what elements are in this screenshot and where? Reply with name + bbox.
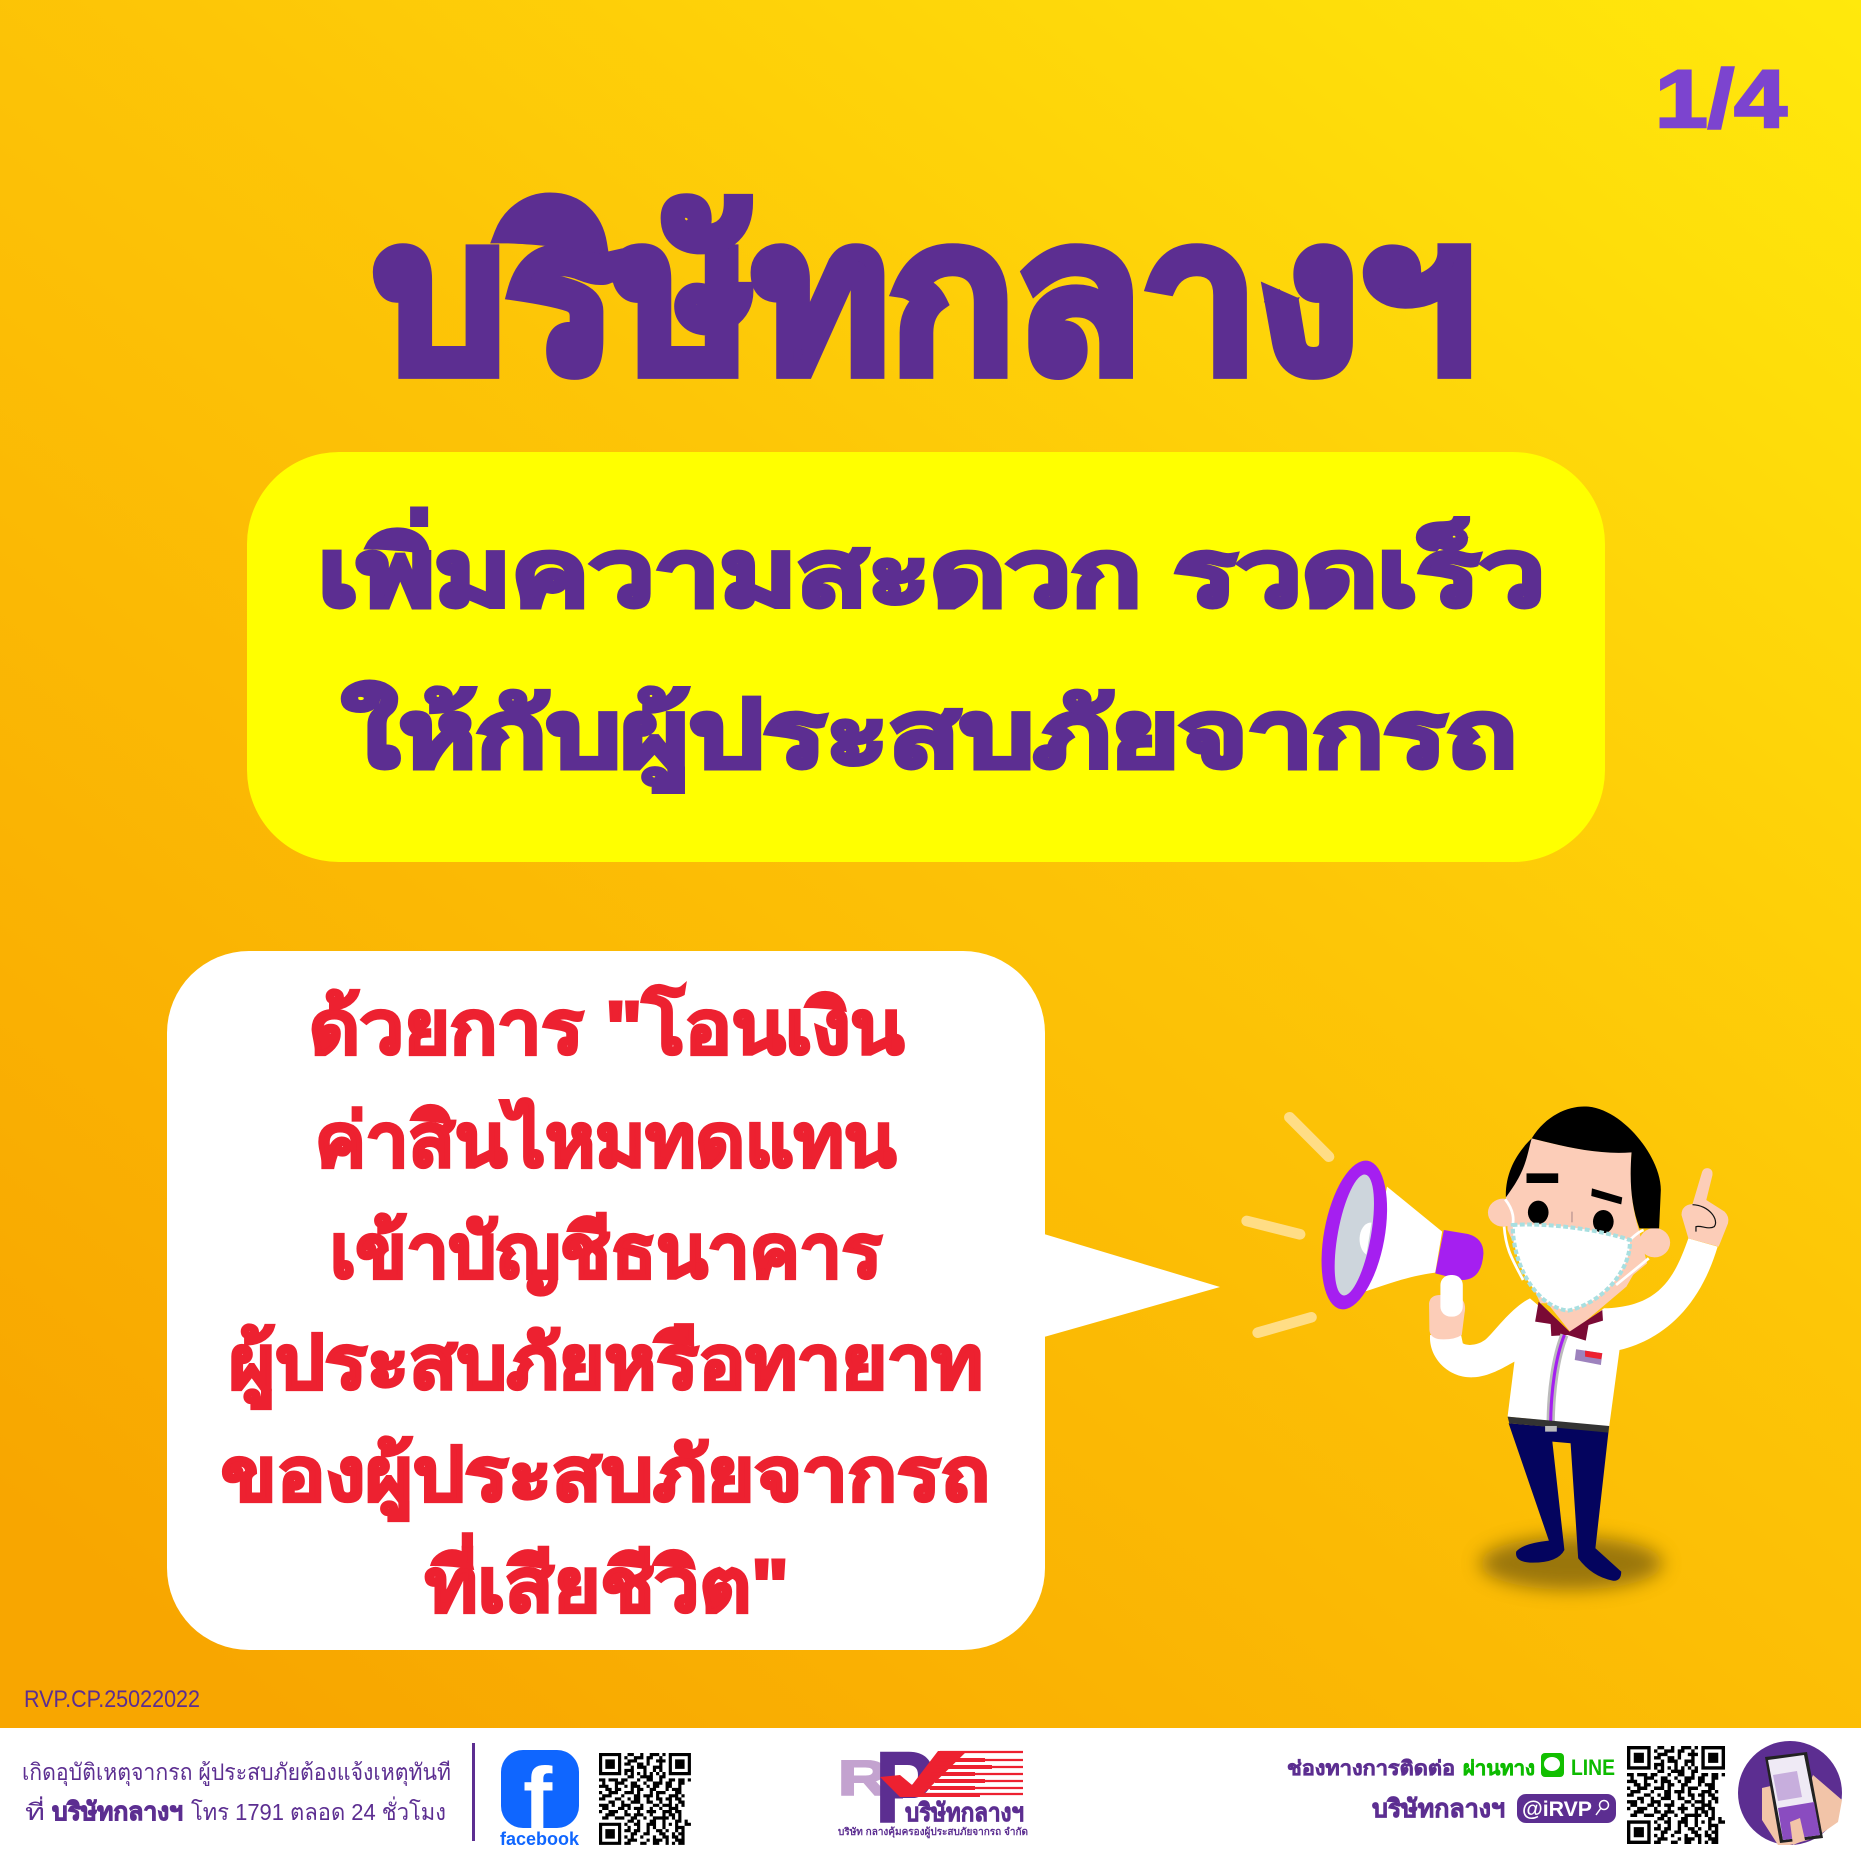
hotline text: ที่: [25, 1796, 45, 1825]
LINE contact: บริษัทกลางฯ: [1372, 1795, 1505, 1823]
headline line 1: เพิ่มความสะดวก รวดเร็ว: [318, 508, 1545, 625]
eyebrows and eyes: [1527, 1173, 1622, 1233]
ground shadow: [1480, 1537, 1663, 1590]
logo: RVP: [838, 1732, 1028, 1844]
face: [1506, 1138, 1647, 1303]
hotline text: [22, 1759, 451, 1826]
title: บริษัทกลางฯ: [374, 180, 1475, 415]
icon: facebook: facebook: [500, 1829, 580, 1849]
page number 1/4: 1/4: [1655, 54, 1787, 145]
megaphone: [1311, 1156, 1483, 1314]
logo: RVP: P: [875, 1732, 935, 1844]
QR code: LINE: [1627, 1748, 1725, 1842]
shirt: [1430, 1238, 1718, 1427]
belt: [1508, 1417, 1609, 1433]
hotline text: บริษัทกลางฯ: [52, 1798, 183, 1826]
hand holding handle: [1429, 1295, 1465, 1339]
bubble text: [221, 984, 990, 1627]
panel: footer: [0, 1728, 1861, 1861]
icon: phone in hand: [1738, 1741, 1842, 1845]
bubble text: ที่เสียชีวิต": [425, 1533, 789, 1627]
LINE contact: @iRVP: [1522, 1798, 1592, 1821]
bubble text: เข้าบัญชีธนาคาร: [330, 1210, 882, 1295]
icon: facebook: [500, 1749, 580, 1849]
LINE contact: LINE: [1571, 1755, 1615, 1780]
ears: [1488, 1199, 1518, 1227]
shirt collar: [1535, 1302, 1603, 1341]
bubble text: ค่าสินไหมทดแทน: [315, 1097, 896, 1182]
bubble text: ผู้ประสบภัยหรือทายาท: [229, 1321, 983, 1409]
character with megaphone: [1247, 1106, 1728, 1590]
LINE contact: [1287, 1753, 1616, 1823]
panel: speech bubble: [167, 951, 1220, 1650]
sound rays: [1247, 1117, 1329, 1333]
panel: yellow headline box: [247, 452, 1605, 862]
headline line 2: ให้กับผู้ประสบภัยจากรถ: [342, 682, 1517, 792]
LINE contact: ผ่านทาง: [1463, 1758, 1535, 1780]
shirt badge: [1575, 1349, 1602, 1365]
face mask: [1504, 1199, 1649, 1311]
shirt placket: [1551, 1335, 1564, 1428]
hotline text: โทร 1791 ตลอด 24 ชั่วโมง: [191, 1796, 446, 1825]
QR code: facebook: [599, 1755, 691, 1843]
bubble text: ด้วยการ "โอนเงิน: [309, 984, 904, 1069]
hair: [1506, 1106, 1661, 1228]
LINE contact: ช่องทางการติดต่อ: [1287, 1758, 1455, 1780]
hotline text: เกิดอุบัติเหตุจากรถ ผู้ประสบภัยต้องแจ้งเหตุทันที: [22, 1759, 451, 1786]
logo: RVP: บริษัท กลางคุ้มครองผู้ประสบภัยจากรถ จำกัด: [838, 1826, 1028, 1839]
bubble text: ของผู้ประสบภัยจากรถ: [221, 1433, 990, 1521]
reference code: RVP.CP.25022022: [24, 1686, 200, 1713]
neck: [1537, 1257, 1644, 1333]
icon: facebook: f: [523, 1749, 553, 1848]
logo: RVP: R: [838, 1752, 888, 1806]
logo: RVP: บริษัทกลางฯ: [905, 1799, 1024, 1827]
trousers: [1509, 1423, 1621, 1581]
raised hand: [1681, 1168, 1728, 1247]
divider: [472, 1743, 475, 1841]
